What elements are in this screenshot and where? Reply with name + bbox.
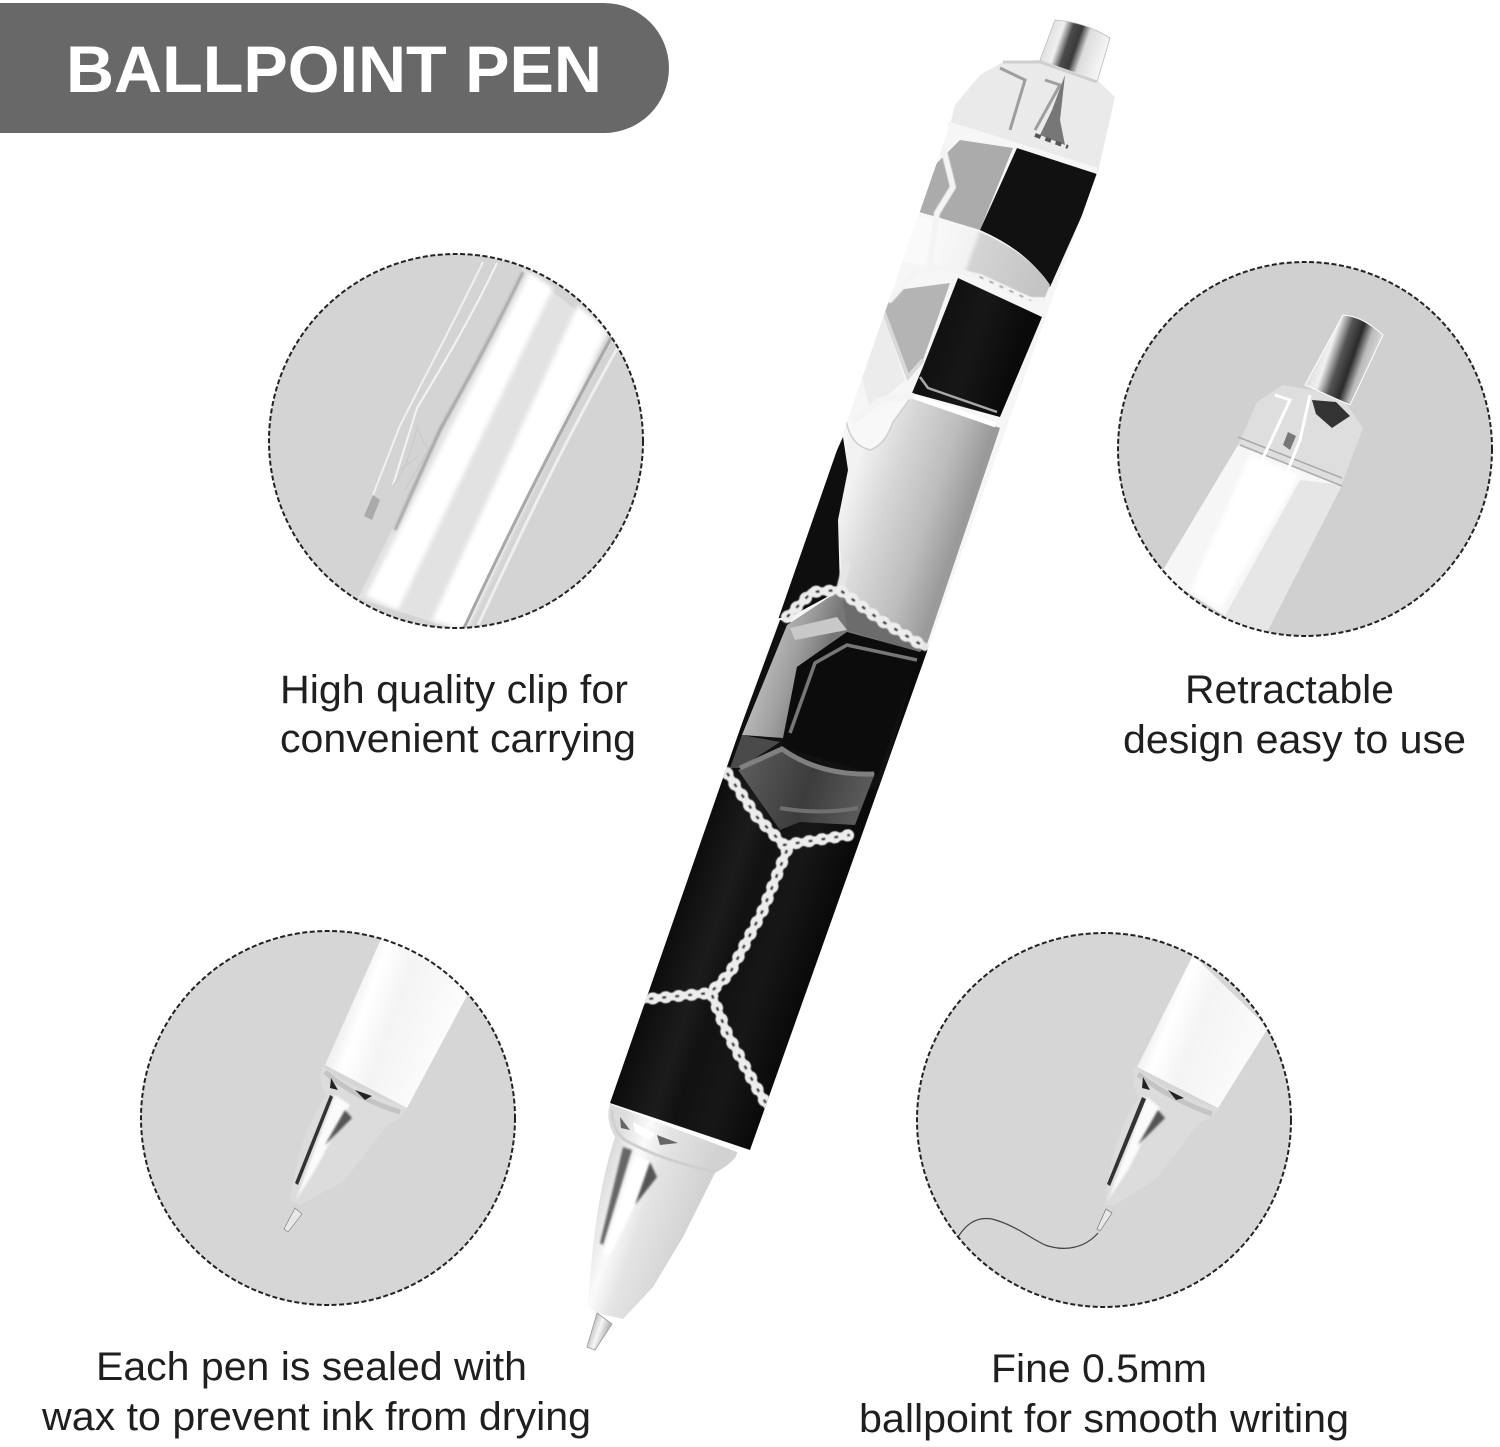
tip close-up image <box>284 930 470 1232</box>
light band <box>964 232 1050 298</box>
caption: clip: High quality clip for <box>280 668 628 712</box>
gray upper segment <box>912 140 1013 230</box>
panel: plunger detail <box>1118 262 1492 640</box>
caption: fine tip: ballpoint for smooth writing <box>859 1397 1349 1441</box>
black upper segment <box>980 148 1100 287</box>
ink line <box>958 1218 1098 1248</box>
chain net <box>637 147 1043 1110</box>
pen illustration <box>587 20 1120 1350</box>
lower gray panel <box>838 395 1000 650</box>
plunger close-up image <box>1160 315 1383 640</box>
clip close-up image <box>358 262 622 632</box>
caption: wax seal <box>41 1345 591 1439</box>
caption: retractable <box>1123 668 1466 762</box>
black mid segment <box>912 278 1042 417</box>
black hexagon <box>792 632 920 694</box>
dark gray band <box>730 735 780 768</box>
title banner <box>0 3 669 133</box>
writing tip close-up image <box>958 955 1268 1248</box>
caption: wax seal: Each pen is sealed with <box>96 1345 527 1389</box>
panel: tip detail <box>141 930 515 1305</box>
caption: retractable: design easy to use <box>1123 718 1466 762</box>
white blob <box>846 396 912 450</box>
gray facet <box>883 283 950 377</box>
pen cap <box>950 60 1115 172</box>
pen body <box>600 100 1120 1160</box>
pen nib <box>587 1104 737 1350</box>
title text: BALLPOINT PEN <box>66 32 602 106</box>
lower black body <box>610 620 928 1150</box>
panel: writing tip detail <box>917 933 1291 1307</box>
black sliver <box>778 437 848 618</box>
caption: clip <box>280 668 636 761</box>
panel: clip detail <box>269 254 643 632</box>
caption: fine tip <box>859 1347 1349 1441</box>
pen plunger <box>1040 20 1110 82</box>
caption: retractable: Retractable <box>1185 668 1394 712</box>
caption: fine tip: Fine 0.5mm <box>991 1347 1207 1391</box>
caption: wax seal: wax to prevent ink from drying <box>41 1395 591 1439</box>
caption: clip: convenient carrying <box>280 717 636 761</box>
hexagon gray surround <box>766 632 890 790</box>
